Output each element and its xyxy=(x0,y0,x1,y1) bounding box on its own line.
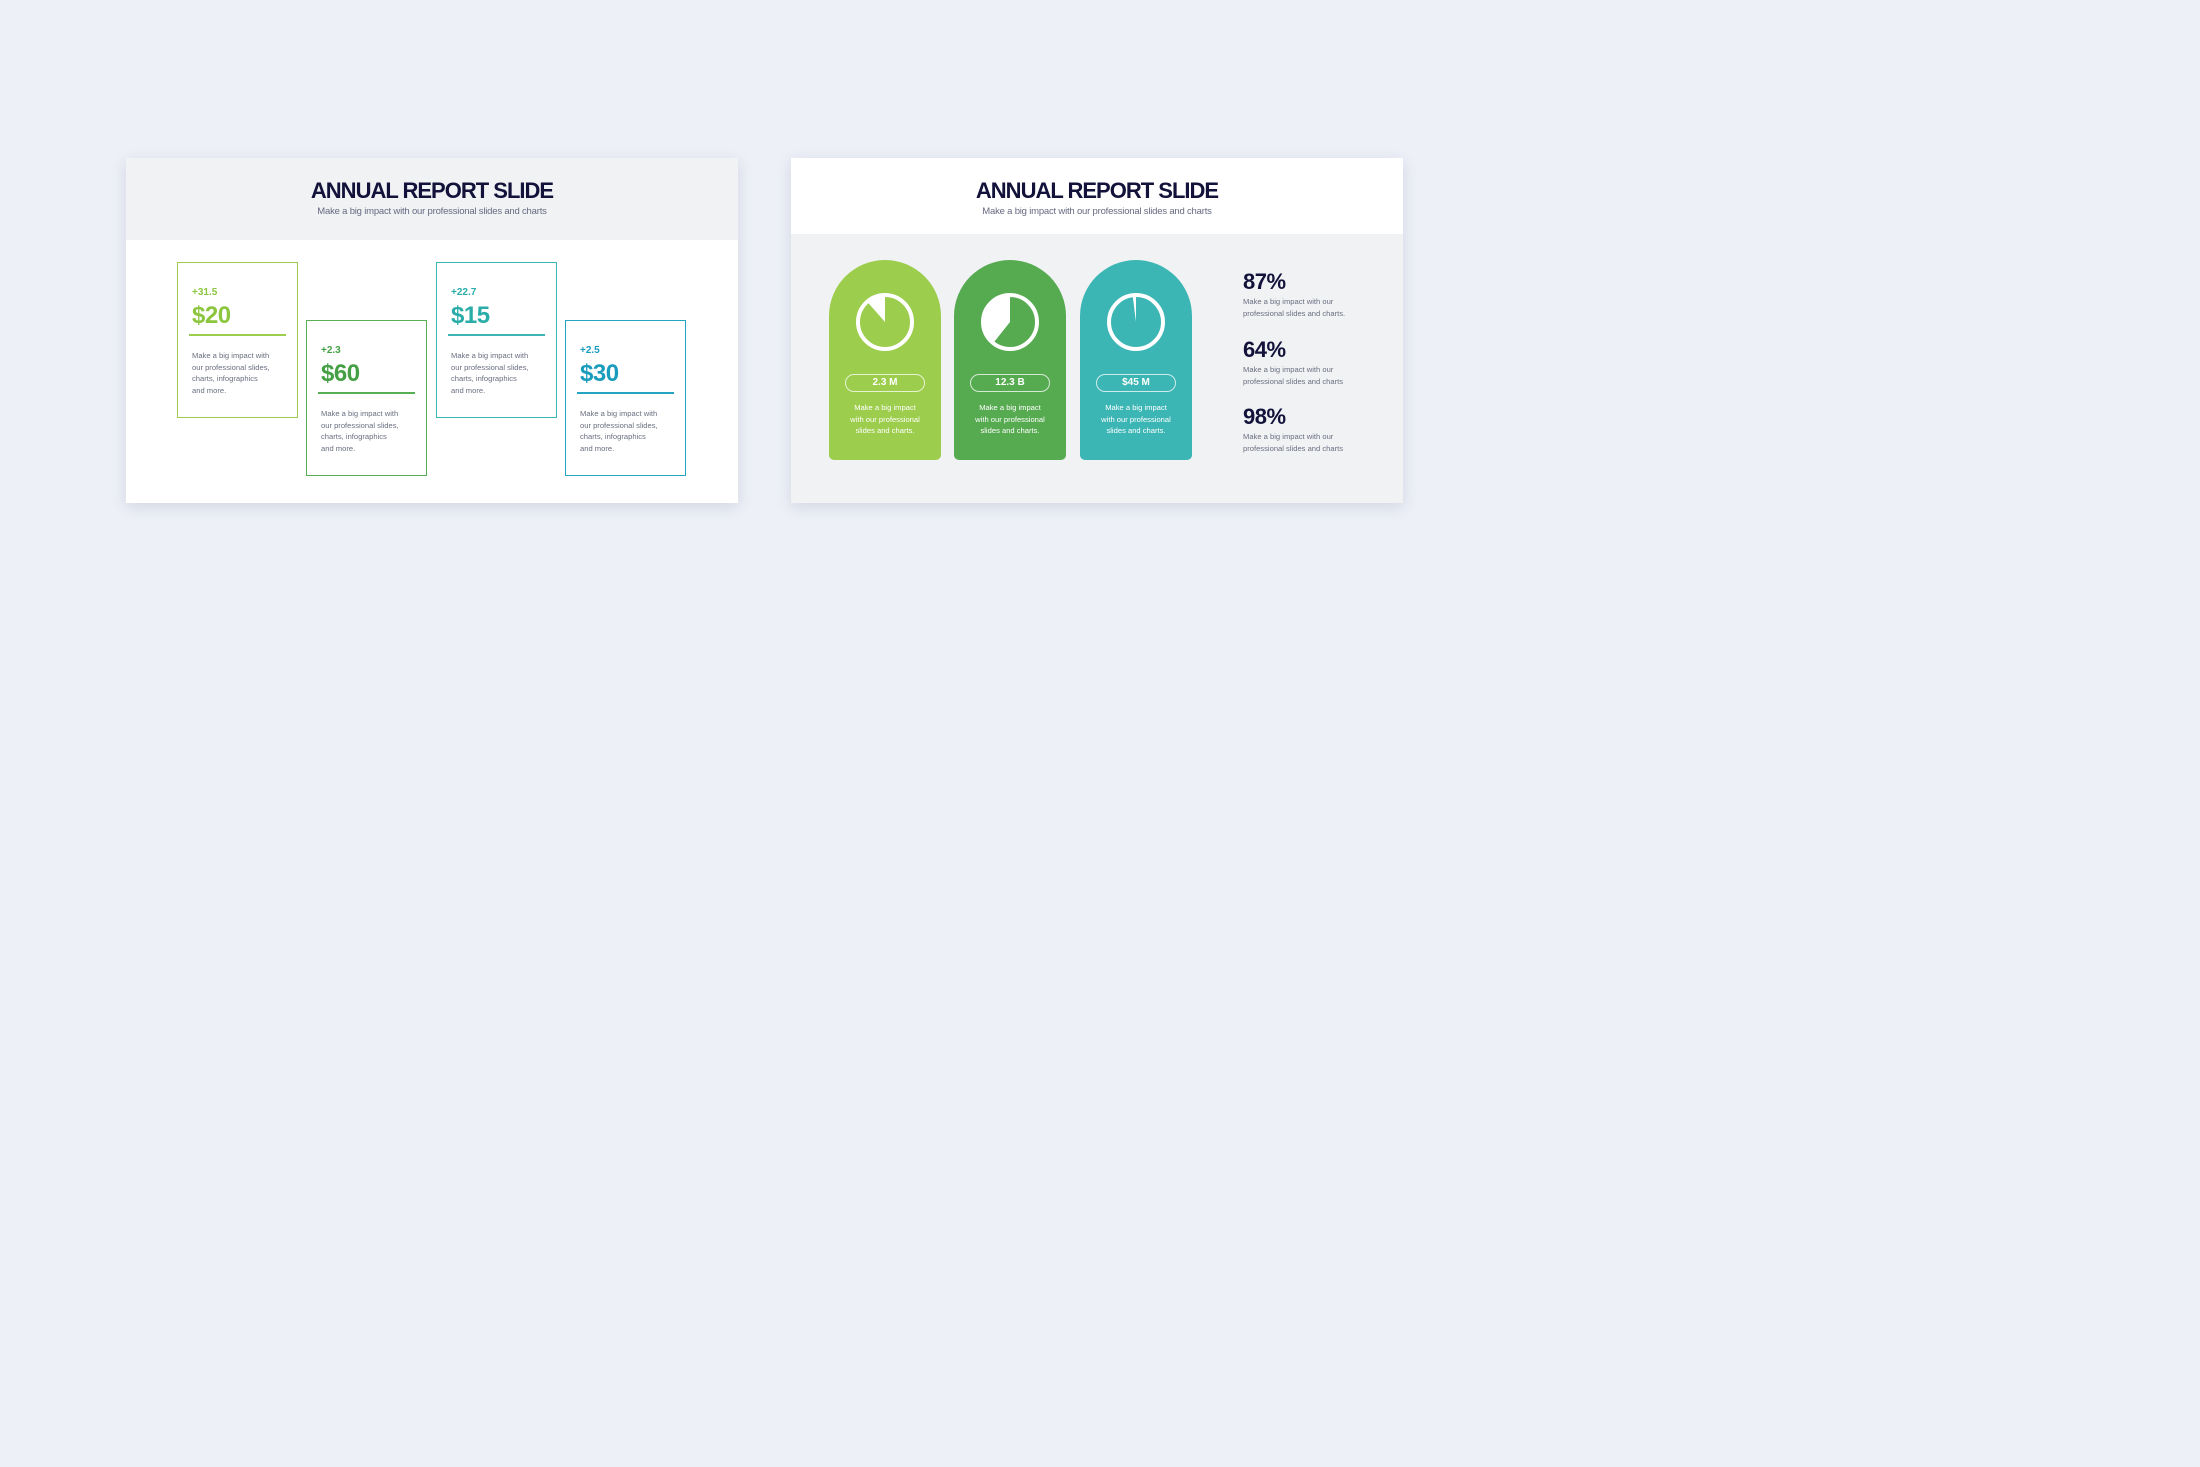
stat: 87% xyxy=(1243,269,1345,318)
pill: 2.3 M xyxy=(829,260,941,460)
stat: 87%: 87% xyxy=(1243,269,1286,294)
icon: pie 98% xyxy=(1107,293,1165,351)
card: $60: Make a big impact with xyxy=(321,409,398,418)
subtitle: Make a big impact with our professional slides and charts xyxy=(317,206,547,217)
card: $20: $20 xyxy=(192,302,231,329)
card: $15: +22.7 xyxy=(451,287,476,298)
pill: $45 M: slides and charts. xyxy=(1106,426,1166,435)
card: $15: our professional slides, xyxy=(451,363,529,372)
stat: 98%: Make a big impact with our xyxy=(1243,432,1333,441)
card: $20: and more. xyxy=(192,386,226,395)
card: $30: Make a big impact with xyxy=(580,409,657,418)
pill: 2.3 M: 2.3 M xyxy=(872,377,898,388)
card: $30 xyxy=(565,320,686,476)
stat: 64%: 64% xyxy=(1243,337,1286,362)
pill: 2.3 M: with our professional xyxy=(850,414,920,424)
card: $60: and more. xyxy=(321,444,355,453)
card: $30: our professional slides, xyxy=(580,421,658,430)
pill: $45 M: with our professional xyxy=(1101,414,1171,424)
header band xyxy=(126,158,738,240)
pill: $45 M: $45 M xyxy=(1122,377,1150,388)
stat: 98%: professional slides and charts xyxy=(1243,444,1343,452)
card: $20: charts, infographics xyxy=(192,374,258,383)
stat: 64% xyxy=(1243,337,1343,386)
card: $20: +31.5 xyxy=(192,287,217,298)
card: $15: $15 xyxy=(451,302,490,329)
title: ANNUAL REPORT SLIDE xyxy=(976,178,1218,203)
stat: 98% xyxy=(1243,404,1343,452)
stat: 87%: professional slides and charts. xyxy=(1243,308,1345,318)
pill: 12.3 B: 12.3 B xyxy=(995,377,1025,388)
card: $30: charts, infographics xyxy=(580,432,646,441)
icon: pie 64% xyxy=(981,293,1039,351)
card: $20: Make a big impact with xyxy=(192,351,269,360)
card: $60 xyxy=(306,320,427,476)
card: $30: +2.5 xyxy=(580,345,600,356)
icon: pie 87% xyxy=(856,293,914,351)
card: $60: our professional slides, xyxy=(321,421,399,430)
pill: 2.3 M: Make a big impact xyxy=(854,403,916,412)
pill: 12.3 B: slides and charts. xyxy=(980,426,1040,435)
card: $20: our professional slides, xyxy=(192,363,270,372)
card: $60: +2.3 xyxy=(321,345,341,356)
header band xyxy=(791,158,1403,234)
card: $15: and more. xyxy=(451,386,485,395)
pill: $45 M: Make a big impact xyxy=(1105,403,1167,412)
card: $60: charts, infographics xyxy=(321,432,387,441)
card: $20 xyxy=(177,262,298,418)
card: $15 xyxy=(436,262,557,418)
pill: 12.3 B xyxy=(954,260,1066,460)
subtitle: Make a big impact with our professional slides and charts xyxy=(982,206,1212,217)
card: $15: charts, infographics xyxy=(451,374,517,383)
stat: 98%: 98% xyxy=(1243,404,1286,429)
pill: 12.3 B: with our professional xyxy=(975,414,1045,424)
panel: slide 1 xyxy=(126,158,738,503)
card: $60: $60 xyxy=(321,360,360,387)
card: $30: and more. xyxy=(580,444,614,453)
stat: 64%: professional slides and charts xyxy=(1243,376,1343,386)
stat: 87%: Make a big impact with our xyxy=(1243,297,1333,306)
pill: $45 M xyxy=(1080,260,1192,460)
pill: 12.3 B: Make a big impact xyxy=(979,403,1041,412)
panel: slide 2 xyxy=(791,158,1403,503)
card: $15: Make a big impact with xyxy=(451,351,528,360)
title: ANNUAL REPORT SLIDE xyxy=(311,178,553,203)
stat: 64%: Make a big impact with our xyxy=(1243,365,1333,374)
card: $30: $30 xyxy=(580,360,619,387)
pill: 2.3 M: slides and charts. xyxy=(855,426,915,435)
